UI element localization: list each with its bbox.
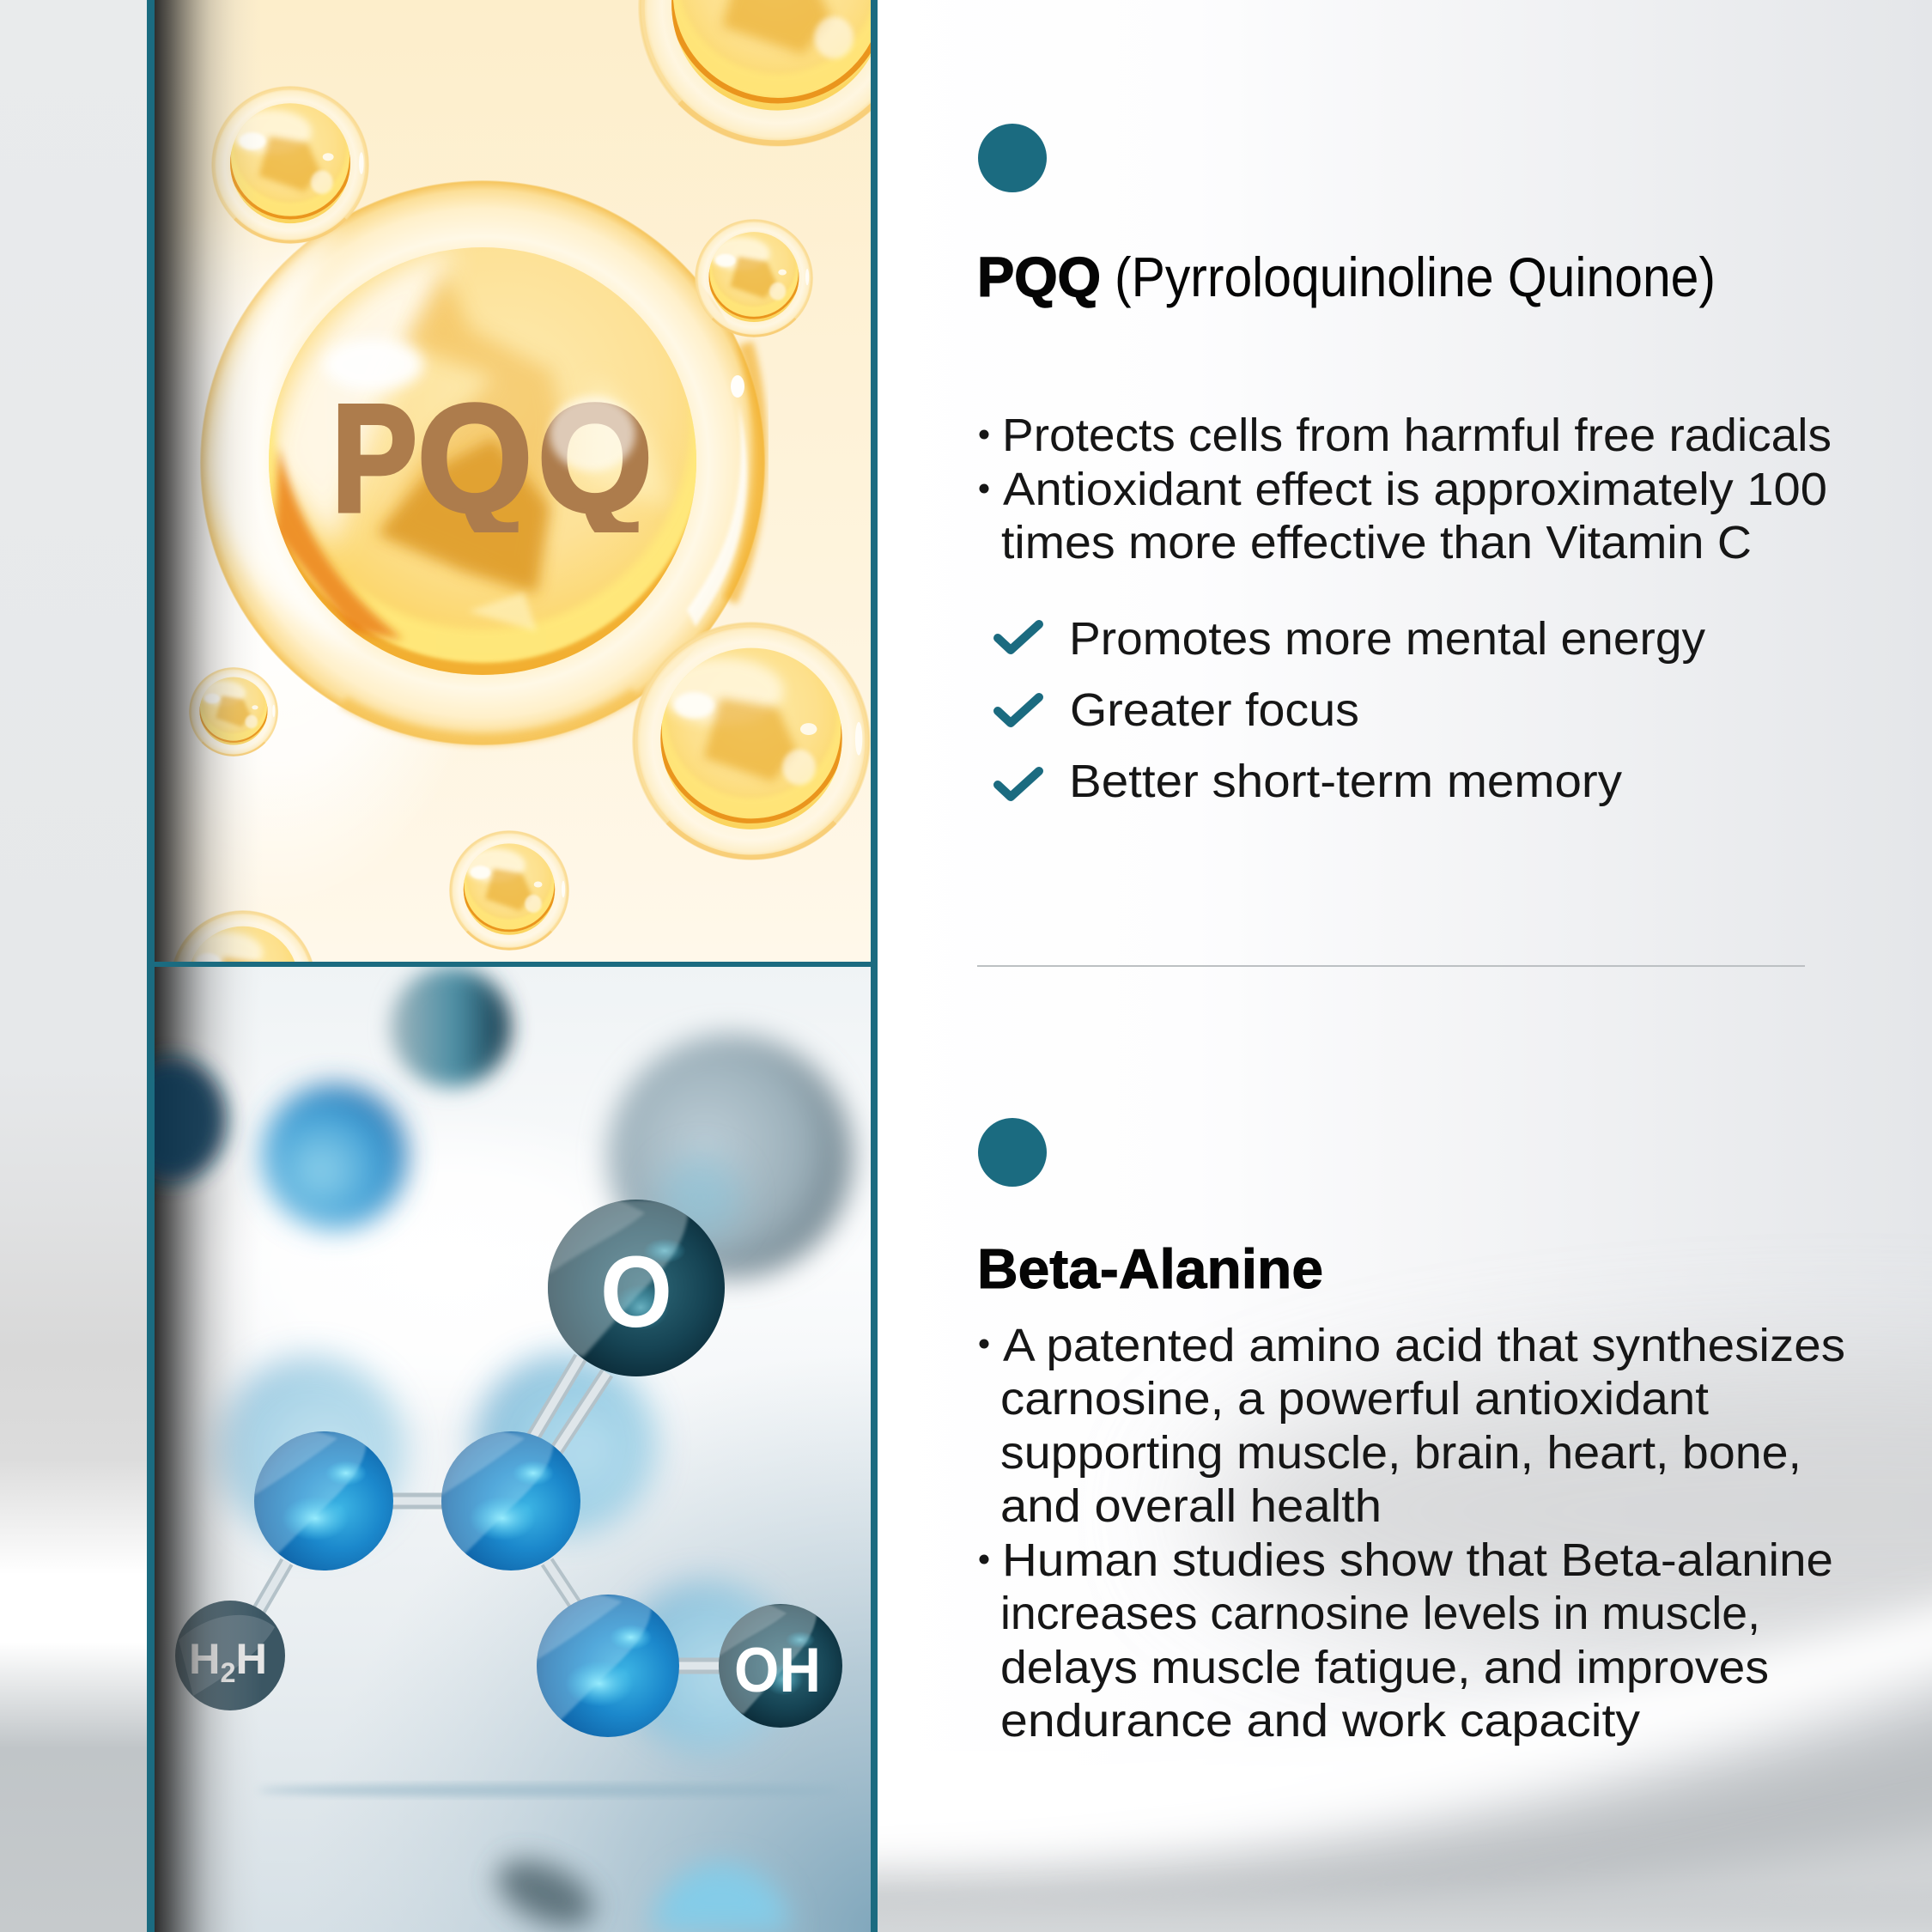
text: Beta-Alanine bullet list: endurance and work capacity <box>1000 1695 1640 1747</box>
text: Beta-Alanine bullet list <box>979 1320 1845 1747</box>
text: PQQ on bubble: Q <box>538 373 653 544</box>
icon: bubble lower left <box>189 665 278 756</box>
atom: H2H: 2 <box>221 1657 235 1688</box>
atom: blue left <box>240 1425 393 1575</box>
icon: check 3 <box>998 771 1039 797</box>
text: benefit 1: Promotes more mental energy <box>1069 613 1705 665</box>
text: PQQ on bubble: P <box>331 373 417 544</box>
atom: OH: OH <box>734 1636 821 1705</box>
text: benefit 3: Better short-term memory <box>1069 756 1622 807</box>
atom: H2H: H <box>235 1635 267 1683</box>
text: Beta-Alanine bullet list: A patented amino acid that synthesizes <box>1003 1320 1845 1371</box>
atom: H2H: H <box>189 1635 220 1683</box>
text: PQQ on bubble: Q <box>417 373 532 544</box>
atom: H2H <box>175 1601 285 1710</box>
section: Beta-Alanine <box>977 1118 1845 1747</box>
atom: blue lower <box>522 1588 679 1741</box>
text: Beta-Alanine bullet list: increases carnosine levels in muscle, <box>1000 1588 1760 1639</box>
heading: Beta-Alanine: Beta-Alanine <box>977 1237 1323 1300</box>
icon: bubble lower right <box>632 616 871 860</box>
text: Beta-Alanine bullet list: delays muscle fatigue, and improves <box>1000 1642 1769 1693</box>
heading: PQQ: (Pyrroloquinoline Quinone) <box>1115 246 1716 308</box>
panel: PQQ bubbles image <box>165 0 871 962</box>
blurred dark atom at left edge <box>117 1058 227 1182</box>
icon: bubble bottom <box>449 828 569 951</box>
text: PQQ bullet list: Antioxidant effect is approximately 100 <box>1003 464 1827 515</box>
text: PQQ bullet list: Protects cells from harmful free radicals <box>1002 410 1832 461</box>
text: PQQ bullet list <box>979 410 1832 568</box>
icon: teal dot PQQ <box>978 124 1047 192</box>
text: benefit 2: Greater focus <box>1070 684 1359 736</box>
panel frame <box>147 0 878 1932</box>
blurred background atoms <box>218 967 852 1932</box>
panel: molecule image <box>155 967 871 1932</box>
atom: O <box>530 1191 725 1376</box>
atom: O: O <box>600 1236 672 1349</box>
text: Beta-Alanine bullet list: supporting muscle, brain, heart, bone, <box>1000 1427 1801 1479</box>
heading: PQQ: PQQ <box>977 246 1101 308</box>
atom: blue center <box>428 1425 580 1575</box>
text: Beta-Alanine bullet list: and overall health <box>1000 1480 1382 1532</box>
text: Beta-Alanine bullet list: Human studies show that Beta-alanine <box>1002 1534 1833 1586</box>
icon: large central bubble <box>200 180 765 745</box>
icon: teal dot Beta-Alanine <box>978 1118 1047 1187</box>
icon: bubble top right <box>638 0 871 147</box>
atom: OH <box>707 1598 842 1728</box>
icon: bubble right <box>695 216 813 337</box>
molecule bonds <box>249 1358 726 1666</box>
icon: check 2 <box>998 697 1039 723</box>
left edge shadow <box>155 0 262 1932</box>
icon: bubble top left <box>211 82 369 244</box>
text: Beta-Alanine bullet list: carnosine, a powerful antioxidant <box>1000 1373 1709 1425</box>
icon: check 1 <box>998 624 1039 650</box>
section: PQQ <box>977 124 1832 807</box>
text: PQQ bullet list: times more effective than Vitamin C <box>1001 517 1752 568</box>
icon: bubble bottom left cut <box>173 910 313 962</box>
